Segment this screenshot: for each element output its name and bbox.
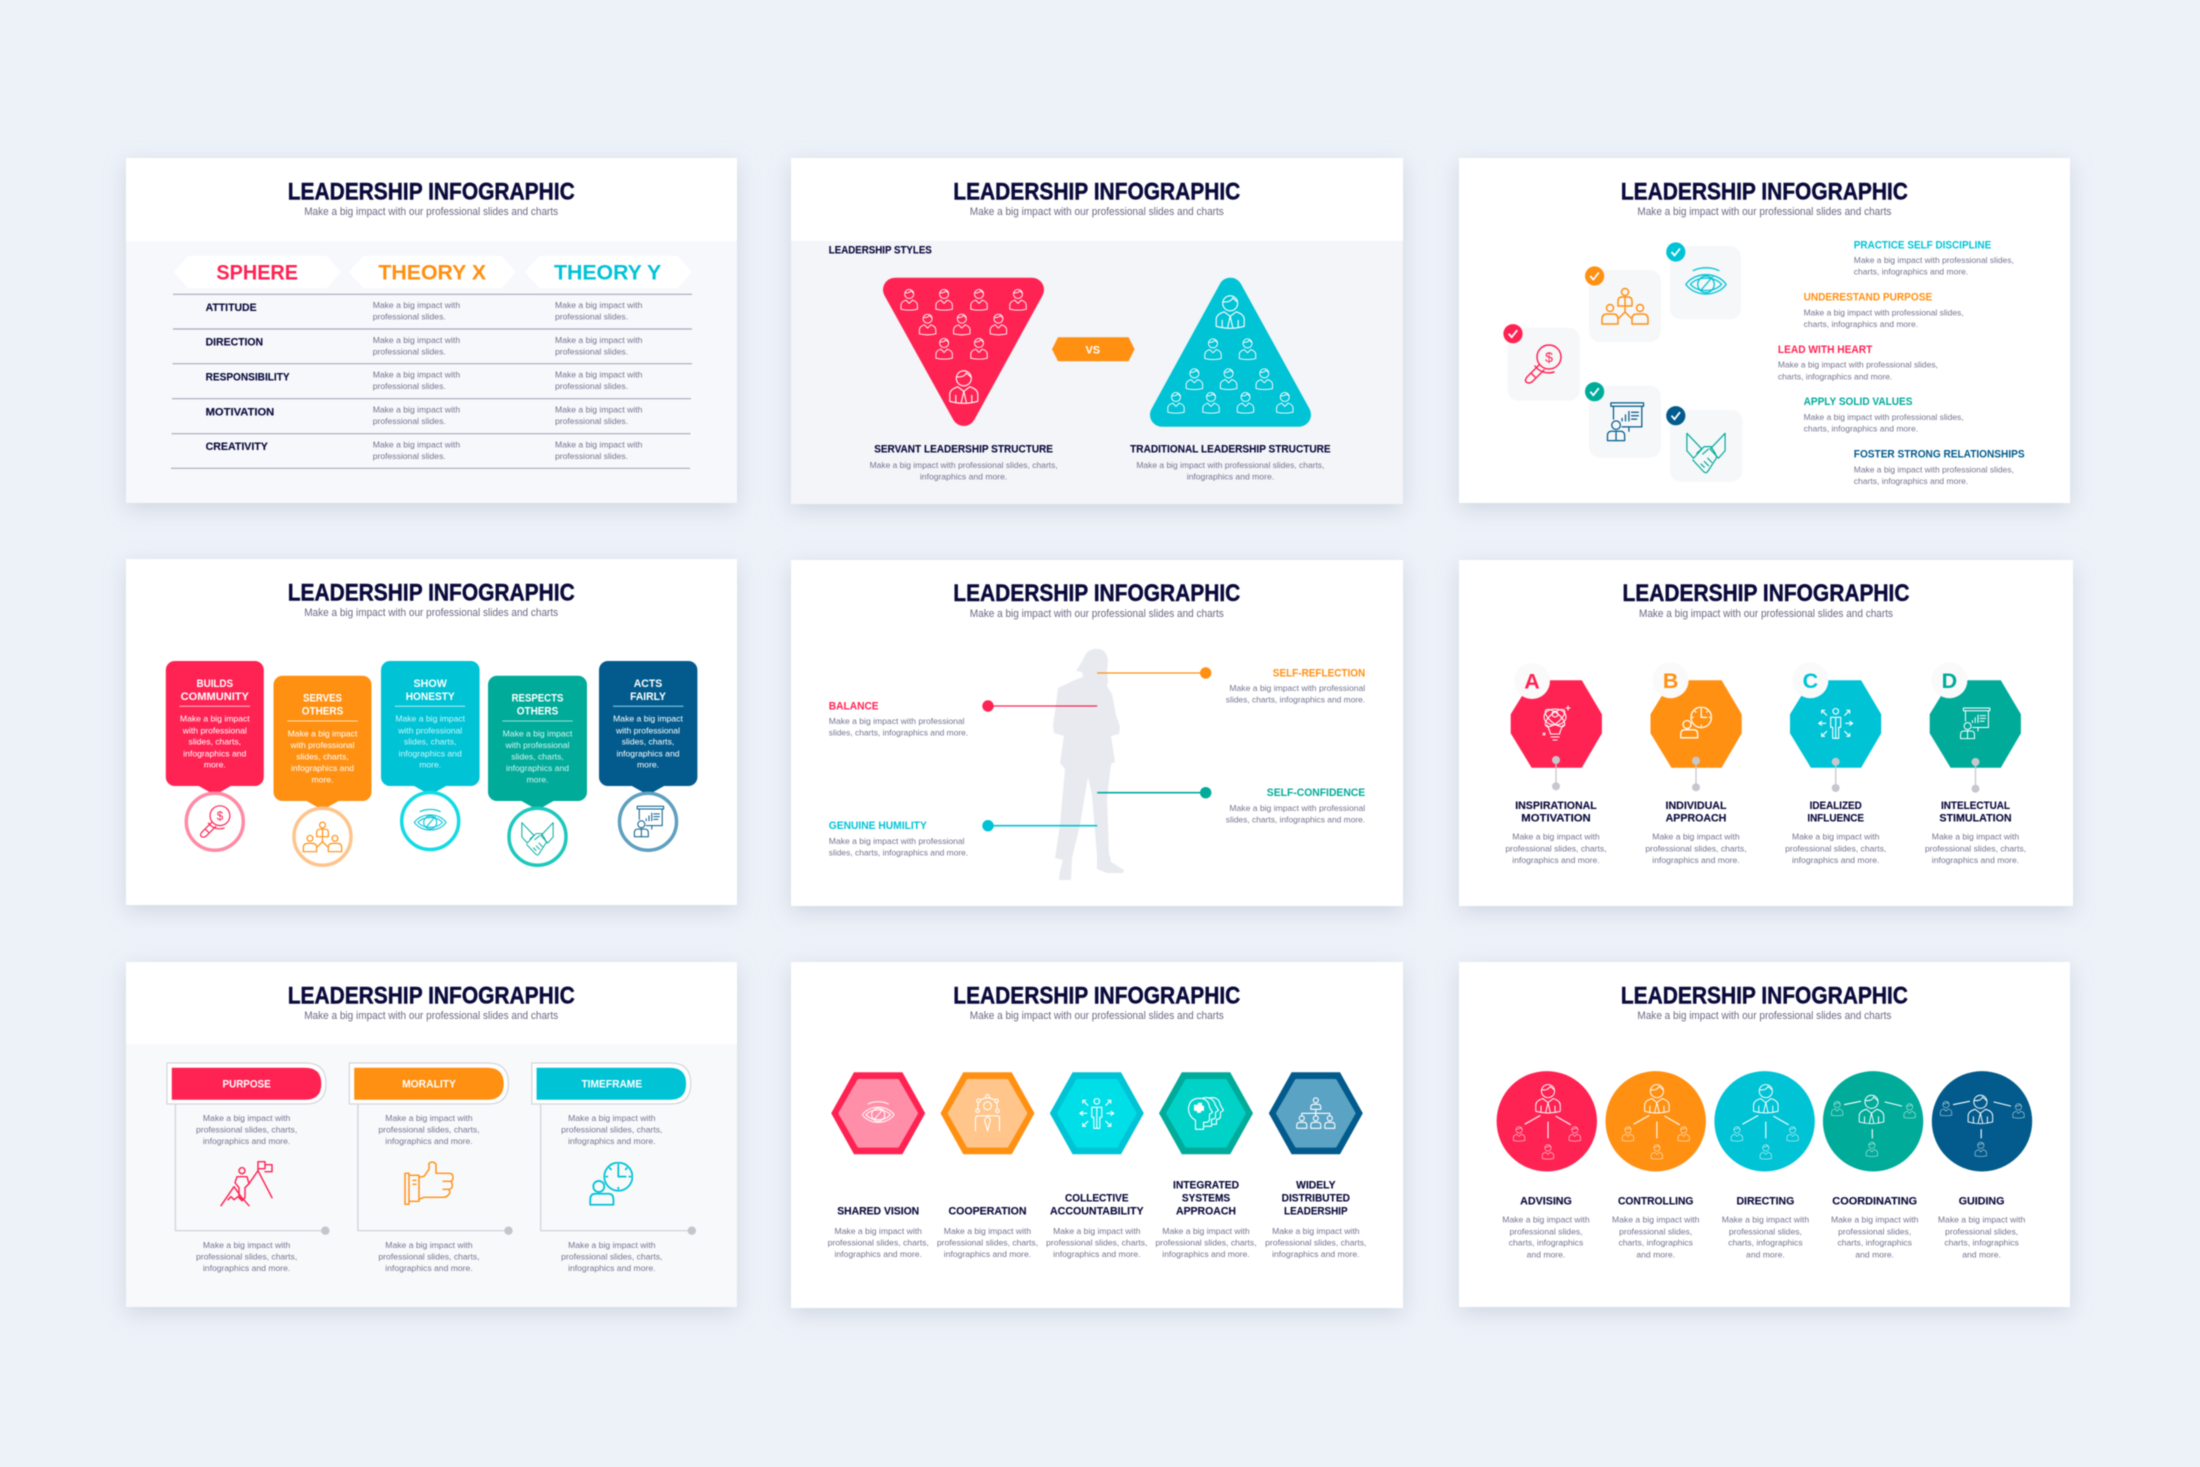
- item: widely distributed leadership: LEADERSHIP: [1284, 1206, 1348, 1218]
- panel: leadership styles: [791, 158, 1403, 504]
- item: cooperation: Make a big impact with: [944, 1226, 1031, 1236]
- item: coordinating: COORDINATING: [1832, 1196, 1917, 1208]
- callout: builds community: [166, 661, 264, 850]
- table row: attitude: professional slides.: [373, 312, 446, 322]
- item: cooperation: professional slides, charts,: [937, 1237, 1038, 1247]
- table row: responsibility: professional slides.: [373, 381, 446, 391]
- column header: sphere: [174, 256, 341, 288]
- table row: motivation: Make a big impact with: [555, 404, 643, 414]
- item A: inspirational motivation: INSPIRATIONAL: [1515, 800, 1597, 812]
- text block: underestand purpose: charts, infographics and more.: [1804, 319, 1918, 329]
- column: timeframe: infographics and more.: [568, 1263, 656, 1273]
- title: LEADERSHIP INFOGRAPHIC: [953, 178, 1240, 206]
- item: directing: and more.: [1746, 1249, 1785, 1259]
- item: controlling: CONTROLLING: [1618, 1196, 1693, 1208]
- callout: serves others: infographics and: [291, 763, 354, 773]
- connector: self-confidence: [1097, 787, 1211, 798]
- slide card: [1459, 158, 2070, 503]
- slide card: [791, 560, 1403, 906]
- panel: purpose morality timeframe: [126, 962, 737, 1307]
- column: timeframe: infographics and more.: [568, 1136, 656, 1146]
- callout: respects others: slides, charts,: [511, 751, 564, 761]
- caption: traditional leadership: infographics and more.: [1187, 472, 1274, 482]
- table row: creativity: CREATIVITY: [206, 441, 269, 453]
- title: LEADERSHIP INFOGRAPHIC: [288, 579, 575, 606]
- item: collective accountability: infographics and more.: [1053, 1249, 1141, 1259]
- table row: attitude: professional slides.: [555, 312, 628, 322]
- table row: responsibility: Make a big impact with: [555, 370, 643, 380]
- text block: apply solid values: APPLY SOLID VALUES: [1804, 396, 1912, 408]
- table row: direction: DIRECTION: [206, 336, 263, 348]
- text block: self-confidence: SELF-CONFIDENCE: [1267, 787, 1365, 799]
- title: LEADERSHIP INFOGRAPHIC: [953, 580, 1240, 607]
- slide card: [1459, 962, 2070, 1307]
- table row: attitude: [206, 300, 643, 322]
- column: morality: Make a big impact with: [385, 1113, 473, 1123]
- column: purpose: infographics and more.: [203, 1263, 290, 1273]
- caption: traditional leadership: TRADITIONAL LEADERSHIP STRUCTURE: [1130, 444, 1331, 456]
- subtitle: Make a big impact with our professional slides and charts: [1639, 608, 1893, 620]
- item D: intelectual stimulation: INTELECTUAL: [1941, 800, 2010, 812]
- item D: intelectual stimulation: [1925, 662, 2026, 865]
- icon card: magnifier: [1503, 324, 1580, 401]
- title: LEADERSHIP INFOGRAPHIC: [953, 982, 1240, 1009]
- icon card: handshake: [1666, 406, 1742, 482]
- title: LEADERSHIP INFOGRAPHIC: [288, 982, 575, 1009]
- callout: respects others: OTHERS: [517, 706, 558, 718]
- table row: responsibility: Make a big impact with: [373, 370, 460, 380]
- item: guiding: [1932, 1071, 2032, 1259]
- callout: builds community: BUILDS: [197, 678, 233, 690]
- text block: practice self discipline: [1854, 239, 2014, 277]
- subtitle: Make a big impact with our professional slides and charts: [304, 607, 559, 619]
- callout: acts fairly: FAIRLY: [630, 691, 667, 703]
- item: cooperation: COOPERATION: [948, 1206, 1027, 1218]
- text block: lead with heart: charts, infographics and more.: [1778, 371, 1892, 381]
- column: timeframe: professional slides, charts,: [561, 1252, 662, 1262]
- table row: direction: [206, 335, 643, 356]
- slide card: [1459, 560, 2073, 906]
- text block: apply solid values: [1804, 396, 1964, 434]
- callout: acts fairly: with professional: [615, 725, 680, 735]
- item A: inspirational motivation: MOTIVATION: [1521, 813, 1591, 825]
- text block: self-reflection: [1226, 667, 1365, 705]
- item B: individual approach: INDIVIDUAL: [1666, 800, 1727, 812]
- callout: acts fairly: Make a big impact: [613, 714, 683, 724]
- item: advising: [1497, 1071, 1597, 1259]
- column: purpose: PURPOSE: [222, 1078, 271, 1090]
- item: coordinating: Make a big impact with: [1831, 1215, 1919, 1225]
- column header: theory x: THEORY X: [378, 260, 487, 284]
- panel: five callout cards: [126, 559, 737, 905]
- callout: serves others: OTHERS: [302, 706, 343, 718]
- table row: creativity: professional slides.: [555, 451, 628, 461]
- text block: self-confidence: [1226, 787, 1365, 825]
- callout: respects others: Make a big impact: [503, 728, 573, 738]
- item: guiding: charts, infographics: [1944, 1238, 2019, 1248]
- column: purpose: professional slides, charts,: [196, 1252, 297, 1262]
- callout: show honesty: infographics and: [399, 748, 462, 758]
- column: morality: infographics and more.: [385, 1136, 473, 1146]
- table row: creativity: [206, 439, 643, 461]
- item: integrated systems approach: professional slides, charts,: [1155, 1237, 1257, 1247]
- panel: silhouette qualities: [791, 560, 1403, 906]
- item: widely distributed leadership: DISTRIBUTED: [1282, 1193, 1350, 1205]
- callout: respects others: [488, 676, 587, 865]
- callout: serves others: [274, 676, 372, 865]
- table row: attitude: ATTITUDE: [206, 302, 257, 314]
- silhouette of a leader: [1053, 649, 1124, 880]
- column: purpose: [167, 1063, 330, 1273]
- item: shared vision: Make a big impact with: [834, 1226, 922, 1236]
- text block: practice self discipline: charts, infographics and more.: [1854, 267, 1968, 277]
- table row: direction: professional slides.: [555, 346, 628, 356]
- column: morality: [349, 1063, 513, 1273]
- item: integrated systems approach: infographics and more.: [1162, 1249, 1250, 1259]
- item: integrated systems approach: SYSTEMS: [1182, 1193, 1230, 1205]
- item: widely distributed leadership: professional slides, charts,: [1265, 1237, 1366, 1247]
- callout: show honesty: HONESTY: [406, 691, 455, 703]
- connector: balance: [982, 700, 1097, 712]
- item: directing: Make a big impact with: [1722, 1215, 1809, 1225]
- column: purpose: Make a big impact with: [203, 1240, 291, 1250]
- callout: serves others: more.: [312, 774, 333, 784]
- table row: responsibility: RESPONSIBILITY: [206, 372, 290, 384]
- item B: individual approach: B: [1663, 669, 1678, 693]
- subtitle: Make a big impact with our professional slides and charts: [970, 1010, 1224, 1022]
- text block: genuine humility: Make a big impact with professional: [829, 836, 965, 846]
- item: directing: DIRECTING: [1736, 1196, 1794, 1208]
- table row: attitude: Make a big impact with: [373, 300, 460, 310]
- item: widely distributed leadership: Make a big impact with: [1272, 1226, 1360, 1236]
- item: coordinating: [1823, 1071, 1923, 1259]
- subtitle: Make a big impact with our professional slides and charts: [970, 206, 1224, 218]
- callout: builds community: with professional: [182, 725, 247, 735]
- item: directing: professional slides,: [1729, 1226, 1802, 1236]
- panel: five hexagon practices: [791, 962, 1403, 1308]
- panel: sphere theory table: [126, 158, 737, 503]
- item C: idealized influence: C: [1803, 669, 1818, 693]
- item: controlling: and more.: [1636, 1249, 1675, 1259]
- table background: [126, 241, 737, 503]
- item: widely distributed leadership: [1265, 1072, 1366, 1259]
- table row: motivation: [206, 404, 643, 426]
- slide card: [791, 962, 1403, 1308]
- callout: acts fairly: slides, charts,: [622, 737, 674, 747]
- item: directing: charts, infographics: [1728, 1238, 1803, 1248]
- callout: respects others: with professional: [504, 740, 570, 750]
- callout: serves others: slides, charts,: [296, 751, 349, 761]
- item: cooperation: infographics and more.: [944, 1249, 1031, 1259]
- item A: inspirational motivation: professional slides, charts,: [1505, 843, 1607, 853]
- item B: individual approach: [1645, 662, 1747, 865]
- text block: balance: [829, 700, 968, 738]
- title: LEADERSHIP INFOGRAPHIC: [1621, 982, 1908, 1009]
- callout: serves others: with professional: [289, 740, 355, 750]
- item: collective accountability: [1046, 1072, 1147, 1259]
- item C: idealized influence: Make a big impact with: [1792, 832, 1880, 842]
- text block: underestand purpose: UNDERESTAND PURPOSE: [1804, 292, 1932, 304]
- item: guiding: professional slides,: [1945, 1226, 2018, 1236]
- callout: respects others: infographics and: [506, 763, 569, 773]
- connector: self-reflection: [1097, 667, 1211, 679]
- item: coordinating: charts, infographics: [1837, 1238, 1912, 1248]
- text block: apply solid values: charts, infographics and more.: [1804, 424, 1918, 434]
- item: directing: [1714, 1071, 1815, 1259]
- slide card: [791, 158, 1403, 504]
- slide card: [126, 559, 737, 905]
- text block: foster strong relationships: charts, infographics and more.: [1854, 476, 1968, 486]
- callout: serves others: Make a big impact: [288, 728, 358, 738]
- text block: foster strong relationships: Make a big impact with professional slides,: [1854, 464, 2014, 474]
- caption: traditional leadership: Make a big impact with professional slides, charts,: [1136, 460, 1324, 470]
- table row: motivation: professional slides.: [373, 416, 446, 426]
- text block: balance: slides, charts, infographics and more.: [829, 728, 968, 738]
- item: advising: professional slides,: [1509, 1226, 1583, 1236]
- caption: traditional leadership: [1130, 444, 1331, 482]
- column: timeframe: [532, 1063, 696, 1273]
- slide card: [126, 962, 737, 1307]
- text block: lead with heart: Make a big impact with professional slides,: [1778, 360, 1938, 370]
- versus badge: [1052, 337, 1135, 361]
- text block: balance: Make a big impact with professional: [829, 716, 965, 726]
- item: guiding: and more.: [1962, 1249, 2001, 1259]
- callout: respects others: RESPECTS: [512, 693, 563, 705]
- text block: genuine humility: GENUINE HUMILITY: [829, 820, 927, 832]
- column: morality: MORALITY: [402, 1078, 457, 1090]
- subtitle: Make a big impact with our professional slides and charts: [970, 608, 1224, 620]
- column: timeframe: Make a big impact with: [568, 1113, 656, 1123]
- panel: A B C D hexagons: [1459, 560, 2073, 906]
- column: purpose: infographics and more.: [203, 1136, 290, 1146]
- column: morality: professional slides, charts,: [378, 1252, 480, 1262]
- item: collective accountability: ACCOUNTABILITY: [1050, 1206, 1144, 1218]
- item: shared vision: professional slides, charts,: [828, 1237, 929, 1247]
- text block: underestand purpose: [1804, 292, 1964, 329]
- item C: idealized influence: professional slides, charts,: [1785, 843, 1886, 853]
- teal pyramid: traditional structure: [1162, 290, 1299, 415]
- panel: five circle functions: [1459, 962, 2070, 1307]
- table row: direction: Make a big impact with: [373, 335, 460, 345]
- item B: individual approach: professional slides, charts,: [1645, 843, 1747, 853]
- item: shared vision: [828, 1072, 929, 1259]
- table row: motivation: professional slides.: [555, 416, 628, 426]
- item B: individual approach: Make a big impact with: [1652, 832, 1740, 842]
- column header: theory y: THEORY Y: [554, 260, 661, 284]
- callout: builds community: COMMUNITY: [181, 691, 250, 703]
- text block: self-confidence: slides, charts, infographics and more.: [1226, 815, 1365, 825]
- subtitle: Make a big impact with our professional slides and charts: [304, 206, 559, 218]
- table row: direction: Make a big impact with: [555, 335, 643, 345]
- text block: foster strong relationships: FOSTER STRONG RELATIONSHIPS: [1854, 448, 2025, 460]
- callout: acts fairly: ACTS: [634, 678, 662, 690]
- callout: show honesty: [381, 661, 480, 850]
- item B: individual approach: infographics and more.: [1652, 855, 1740, 865]
- text block: genuine humility: [829, 820, 968, 858]
- text block: self-confidence: Make a big impact with professional: [1229, 803, 1365, 813]
- item: integrated systems approach: INTEGRATED: [1173, 1179, 1239, 1191]
- icon card: eye: [1666, 242, 1741, 319]
- caption: servant leadership: infographics and more.: [920, 472, 1007, 482]
- column header: theory x: [349, 256, 516, 288]
- inverted red pyramid: servant structure: [895, 289, 1032, 414]
- item C: idealized influence: IDEALIZED: [1810, 800, 1862, 812]
- column: timeframe: Make a big impact with: [568, 1240, 656, 1250]
- item A: inspirational motivation: Make a big impact with: [1512, 832, 1600, 842]
- item: integrated systems approach: Make a big impact with: [1162, 1226, 1250, 1236]
- item: controlling: professional slides,: [1619, 1226, 1692, 1236]
- item: guiding: GUIDING: [1959, 1196, 2004, 1208]
- text block: self-reflection: SELF-REFLECTION: [1273, 667, 1365, 679]
- item: collective accountability: Make a big impact with: [1053, 1226, 1141, 1236]
- caption: servant leadership: [870, 444, 1058, 482]
- caption: servant leadership: Make a big impact with professional slides, charts,: [870, 460, 1058, 470]
- text block: self-reflection: slides, charts, infographics and more.: [1226, 695, 1365, 705]
- callout: acts fairly: [599, 661, 697, 850]
- item: controlling: charts, infographics: [1618, 1238, 1693, 1248]
- title: LEADERSHIP INFOGRAPHIC: [288, 178, 575, 206]
- item: collective accountability: COLLECTIVE: [1065, 1193, 1129, 1205]
- callout: respects others: more.: [527, 774, 548, 784]
- item: coordinating: professional slides,: [1838, 1226, 1911, 1236]
- subtitle: Make a big impact with our professional slides and charts: [1637, 206, 1892, 218]
- item: widely distributed leadership: WIDELY: [1296, 1179, 1336, 1191]
- text block: practice self discipline: Make a big impact with professional slides,: [1854, 255, 2014, 265]
- text block: underestand purpose: Make a big impact with professional slides,: [1804, 307, 1964, 317]
- table row: motivation: Make a big impact with: [373, 404, 460, 414]
- callout: builds community: more.: [204, 760, 226, 770]
- item C: idealized influence: INFLUENCE: [1807, 813, 1864, 825]
- subtitle: Make a big impact with our professional slides and charts: [1637, 1010, 1892, 1022]
- text block: apply solid values: Make a big impact with professional slides,: [1804, 412, 1964, 422]
- callout: show honesty: more.: [419, 760, 441, 770]
- item: advising: Make a big impact with: [1502, 1215, 1590, 1225]
- item: coordinating: and more.: [1855, 1249, 1894, 1259]
- item: advising: charts, infographics: [1509, 1238, 1583, 1248]
- column: purpose: Make a big impact with: [203, 1113, 291, 1123]
- content background: [126, 1044, 737, 1307]
- callout: show honesty: Make a big impact: [395, 714, 466, 724]
- panel: five checked principles: [1459, 158, 2070, 503]
- text block: balance: BALANCE: [829, 700, 879, 712]
- callout: show honesty: slides, charts,: [404, 737, 456, 747]
- item B: individual approach: APPROACH: [1666, 813, 1727, 825]
- item D: intelectual stimulation: infographics and more.: [1932, 855, 2019, 865]
- item: controlling: Make a big impact with: [1612, 1215, 1700, 1225]
- text block: self-reflection: Make a big impact with professional: [1229, 683, 1365, 693]
- item: advising: ADVISING: [1520, 1196, 1572, 1208]
- callout: builds community: infographics and: [183, 748, 247, 758]
- table row: responsibility: professional slides.: [555, 381, 628, 391]
- text block: practice self discipline: PRACTICE SELF DISCIPLINE: [1854, 239, 1991, 251]
- text block: lead with heart: [1778, 344, 1938, 381]
- column: morality: infographics and more.: [385, 1263, 473, 1273]
- icon card: presenter: [1585, 382, 1661, 458]
- item D: intelectual stimulation: professional slides, charts,: [1925, 843, 2026, 853]
- item C: idealized influence: [1785, 662, 1886, 865]
- item A: inspirational motivation: infographics and more.: [1512, 855, 1600, 865]
- column: morality: Make a big impact with: [385, 1240, 473, 1250]
- column: purpose: professional slides, charts,: [196, 1124, 297, 1134]
- item: controlling: [1606, 1071, 1706, 1259]
- subtitle: Make a big impact with our professional slides and charts: [304, 1010, 559, 1022]
- item D: intelectual stimulation: D: [1942, 669, 1957, 693]
- item: shared vision: infographics and more.: [834, 1249, 922, 1259]
- item A: inspirational motivation: [1505, 663, 1607, 865]
- item: widely distributed leadership: infographics and more.: [1272, 1249, 1360, 1259]
- table row: motivation: MOTIVATION: [206, 406, 274, 418]
- table row: direction: professional slides.: [373, 346, 446, 356]
- icon card: team: [1585, 266, 1661, 342]
- table row: creativity: Make a big impact with: [373, 439, 460, 449]
- callout: builds community: Make a big impact: [180, 714, 250, 724]
- item C: idealized influence: infographics and more.: [1792, 855, 1879, 865]
- callout: show honesty: SHOW: [414, 678, 448, 690]
- callout: acts fairly: infographics and: [616, 748, 680, 758]
- item D: intelectual stimulation: STIMULATION: [1939, 813, 2012, 825]
- connector: genuine humility: [982, 820, 1097, 831]
- text block: genuine humility: slides, charts, infographics and more.: [829, 848, 968, 858]
- table row: creativity: professional slides.: [373, 451, 446, 461]
- slide card: [126, 158, 737, 503]
- content background: [791, 241, 1403, 504]
- item: cooperation: [937, 1072, 1038, 1259]
- item: advising: and more.: [1527, 1249, 1565, 1259]
- column: timeframe: professional slides, charts,: [561, 1124, 662, 1134]
- versus badge: VS: [1085, 344, 1100, 356]
- column header: theory y: [525, 256, 692, 288]
- callout: serves others: SERVES: [303, 693, 342, 705]
- text block: foster strong relationships: [1854, 448, 2025, 486]
- section label: LEADERSHIP STYLES: [829, 245, 932, 257]
- table row: creativity: Make a big impact with: [555, 439, 643, 449]
- item D: intelectual stimulation: Make a big impact with: [1932, 832, 2019, 842]
- title: LEADERSHIP INFOGRAPHIC: [1622, 580, 1910, 607]
- item A: inspirational motivation: A: [1524, 669, 1540, 693]
- item: integrated systems approach: [1155, 1072, 1257, 1259]
- callout: acts fairly: more.: [637, 760, 659, 770]
- table row: responsibility: [206, 370, 643, 391]
- column header: sphere: SPHERE: [216, 260, 298, 284]
- title: LEADERSHIP INFOGRAPHIC: [1621, 178, 1908, 206]
- item: integrated systems approach: APPROACH: [1176, 1206, 1236, 1218]
- table row: attitude: Make a big impact with: [555, 300, 643, 310]
- column: morality: professional slides, charts,: [378, 1124, 480, 1134]
- callout: builds community: slides, charts,: [189, 737, 241, 747]
- item: guiding: Make a big impact with: [1938, 1215, 2026, 1225]
- caption: servant leadership: SERVANT LEADERSHIP STRUCTURE: [874, 444, 1053, 456]
- callout: show honesty: with professional: [397, 725, 462, 735]
- text block: lead with heart: LEAD WITH HEART: [1778, 344, 1873, 356]
- column: timeframe: TIMEFRAME: [581, 1078, 642, 1090]
- item: collective accountability: professional slides, charts,: [1046, 1237, 1147, 1247]
- item: shared vision: SHARED VISION: [837, 1206, 919, 1218]
